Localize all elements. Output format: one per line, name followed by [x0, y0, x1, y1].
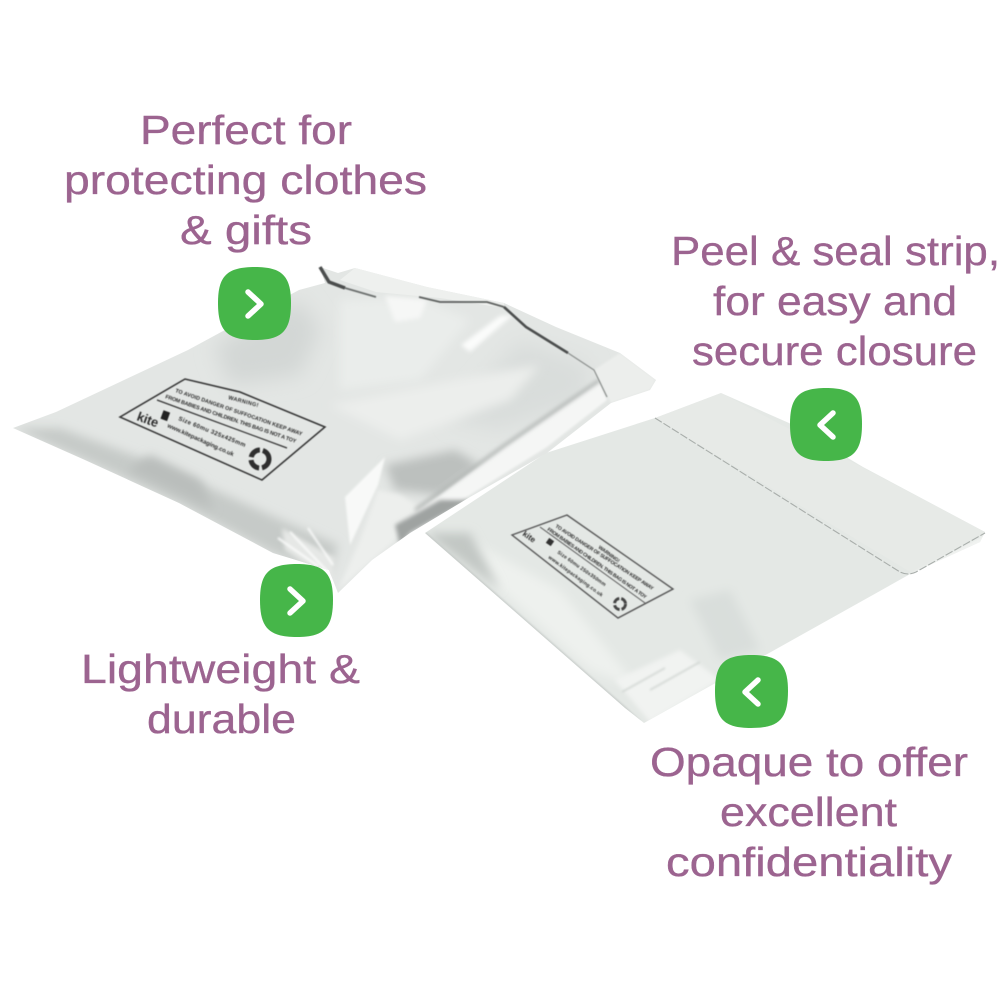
printed warning label: www.kitepackaging.co.uk [546, 554, 604, 599]
illustration: flat mailing bag [425, 393, 985, 723]
printed warning label: FROM BABIES AND CHILDREN. THIS BAG IS NOT A TOY [546, 527, 648, 601]
text block: durable [147, 696, 296, 742]
text block [671, 228, 1000, 374]
text block: for easy and [713, 278, 957, 324]
printed warning label: WARNING! [227, 395, 259, 409]
text block [64, 107, 427, 253]
illustration: filled mailing bag [13, 267, 656, 593]
text block: excellent [720, 789, 898, 835]
printed warning label: www.kitepackaging.co.uk [165, 423, 235, 458]
printed warning label: kite [135, 409, 161, 430]
icon: right chevron button [218, 267, 291, 340]
printed warning label: Size 60mu 250x350mm [556, 550, 607, 588]
printed warning label: WARNING! [597, 545, 621, 565]
printed warning label [120, 379, 325, 480]
printed warning label: kite [521, 529, 538, 545]
text block [650, 739, 968, 885]
printed warning label: FROM BABIES AND CHILDREN. THIS BAG IS NOT A TOY [164, 394, 297, 445]
callout: peel and seal strip [671, 228, 1000, 461]
text block: & gifts [180, 207, 312, 253]
printed warning label [512, 515, 673, 618]
icon: left chevron button [715, 655, 788, 728]
icon: left chevron button [790, 388, 862, 461]
text block: Lightweight & [81, 646, 360, 692]
text block: Opaque to offer [650, 739, 968, 785]
icon: recycling symbol [614, 598, 626, 610]
icon: recycling symbol [251, 450, 269, 468]
callout: lightweight and durable [81, 564, 360, 742]
text block [81, 646, 360, 742]
printed warning label: TO AVOID DANGER OF SUFFOCATION KEEP AWAY [174, 388, 303, 438]
text block: protecting clothes [64, 157, 427, 203]
text block: Peel & seal strip, [671, 228, 1000, 274]
text block: secure closure [692, 328, 977, 374]
text block: confidentiality [666, 839, 953, 885]
callout: perfect for protecting clothes and gifts [64, 107, 427, 340]
callout: opaque and confidential [650, 655, 968, 885]
printed warning label: Size 60mu 325x425mm [177, 416, 246, 449]
icon: right chevron button [260, 564, 333, 637]
printed warning label: TO AVOID DANGER OF SUFFOCATION KEEP AWAY [554, 524, 655, 592]
seal strip fold line [655, 418, 985, 574]
text block: Perfect for [140, 107, 352, 153]
dark seal edge [320, 267, 607, 397]
